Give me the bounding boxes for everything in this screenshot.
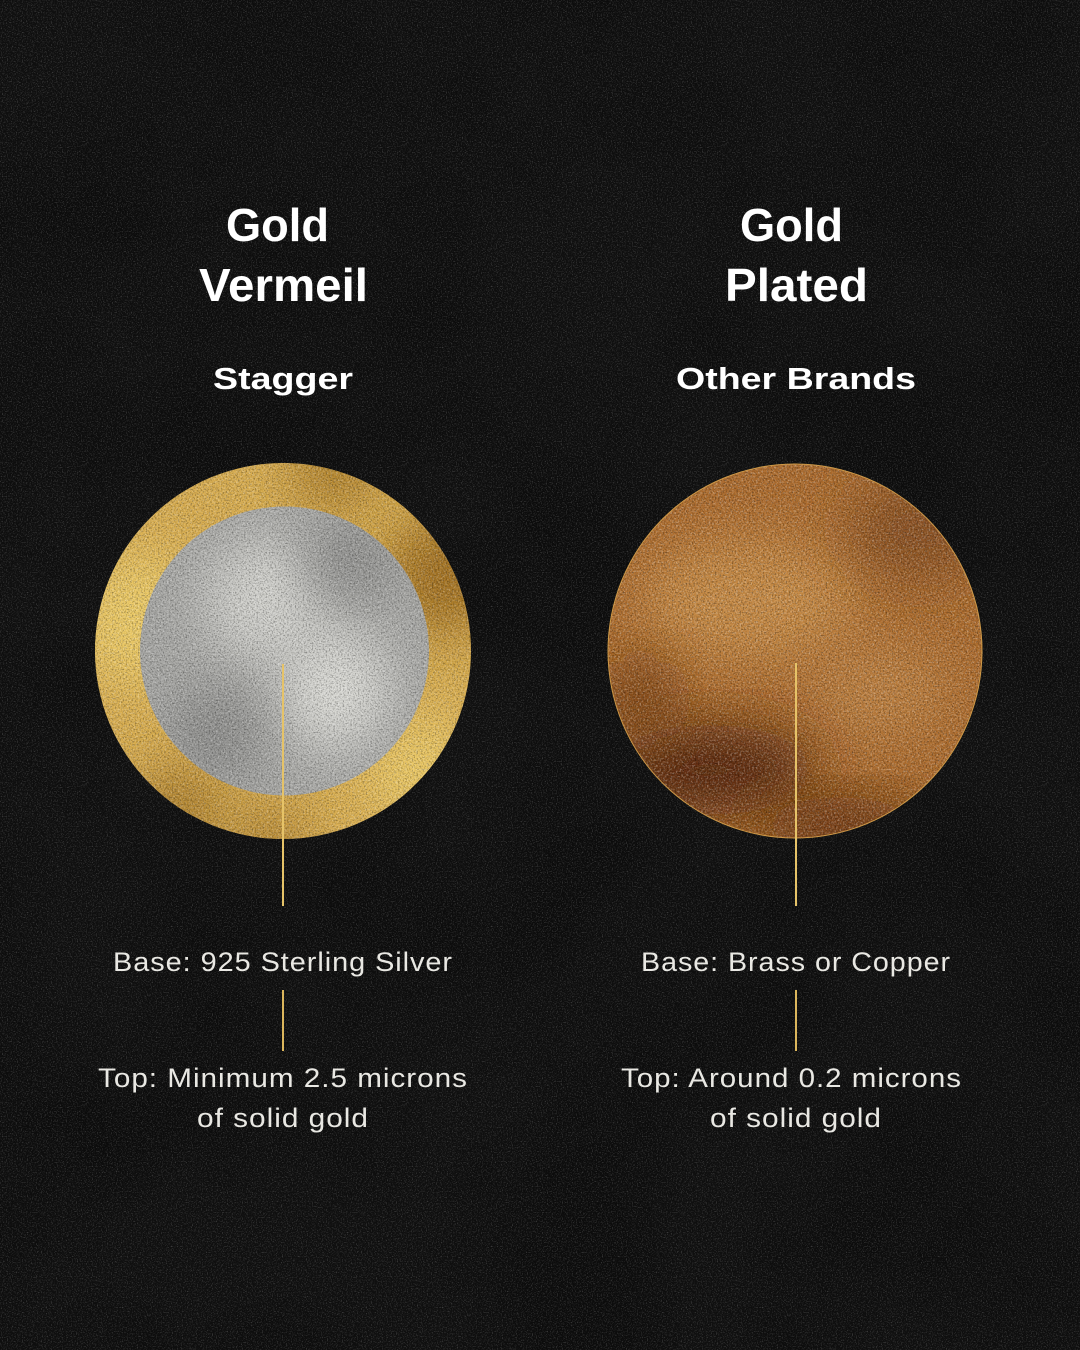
divider line (795, 990, 797, 1051)
diagram: plated disc (600, 458, 990, 853)
silver inner core (135, 502, 435, 802)
heading: gold plated (725, 199, 868, 311)
subheading: stagger: Stagger (213, 361, 353, 396)
label: top layer: Top: Minimum 2.5 microns (98, 1063, 468, 1093)
label: base: Base: 925 Sterling Silver (113, 947, 453, 977)
panel: gold vermeil (95, 208, 471, 1132)
label: top layer (98, 1063, 468, 1133)
label: top layer: of solid gold (197, 1103, 369, 1133)
divider line (282, 990, 284, 1051)
heading: gold vermeil: Gold (226, 199, 329, 251)
heading: gold plated: Plated (725, 259, 868, 311)
connector line (795, 663, 797, 906)
heading: gold vermeil (199, 199, 368, 311)
panel: gold plated (600, 199, 990, 1133)
subheading: other brands: Other Brands (676, 361, 916, 396)
connector line (282, 664, 284, 906)
diagram: vermeil disc (95, 463, 471, 839)
label: base: Base: Brass or Copper (641, 947, 951, 977)
label: top layer: Top: Around 0.2 microns (621, 1063, 962, 1093)
heading: gold plated: Gold (740, 199, 843, 251)
gold outer ring (95, 463, 471, 839)
label: top layer (621, 1063, 962, 1133)
heading: gold vermeil: Vermeil (199, 259, 368, 311)
label: top layer: of solid gold (710, 1103, 882, 1133)
